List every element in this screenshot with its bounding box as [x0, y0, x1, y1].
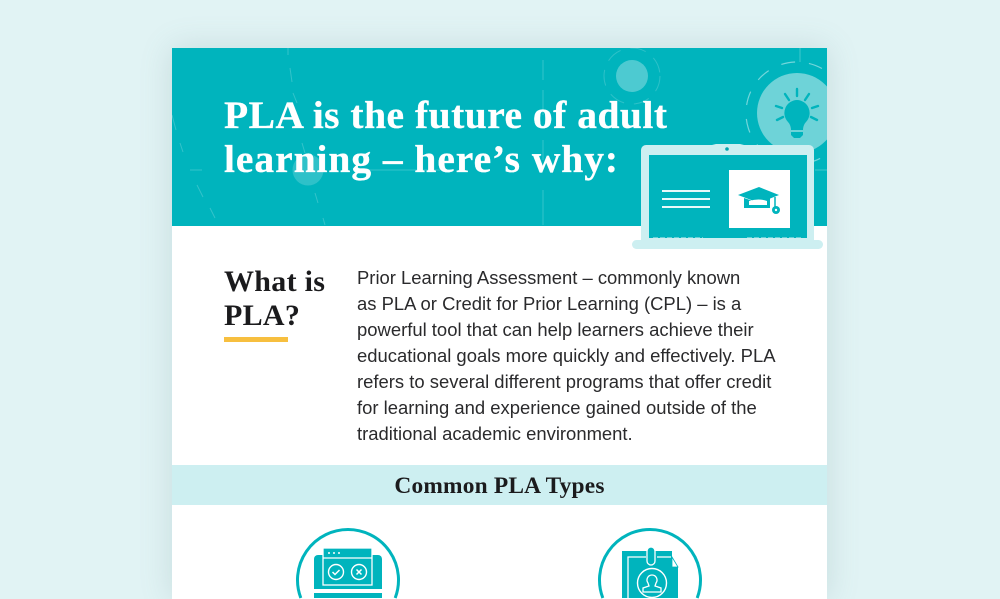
title: learning – here’s why: — [224, 137, 619, 181]
icon: laptop — [632, 144, 823, 249]
icon: light bulb — [746, 48, 827, 170]
title — [224, 93, 668, 181]
icon: portfolio document in circle — [599, 529, 700, 598]
heading: What is PLA?: What is — [224, 265, 325, 298]
heading underline — [224, 337, 288, 342]
text block: PLA definition: traditional academic environment. — [357, 423, 633, 444]
text block: PLA definition: powerful tool that can help learners achieve their — [357, 319, 754, 340]
panel: header banner — [172, 48, 827, 226]
icon: exam window in circle — [298, 529, 398, 598]
decorative background circle, left — [172, 48, 543, 225]
text block: PLA definition — [357, 267, 776, 444]
decorative background circle, top — [604, 48, 660, 104]
title: PLA is the future of adult — [224, 93, 668, 137]
text block: PLA definition: for learning and experience gained outside of the — [357, 397, 757, 418]
text block: PLA definition: as PLA or Credit for Prior Learning (CPL) – is a — [357, 293, 741, 314]
heading: What is PLA? — [224, 265, 325, 332]
text block: PLA definition: educational goals more quickly and effectively. PLA — [357, 345, 776, 366]
panel: Common PLA Types heading band: Common PLA Types — [394, 473, 605, 499]
card — [172, 48, 827, 599]
text block: PLA definition: refers to several different programs that offer credit — [357, 371, 771, 392]
header decoration and icons — [172, 48, 827, 598]
panel: Common PLA Types heading band — [172, 465, 827, 505]
heading: What is PLA?: PLA? — [224, 299, 300, 332]
text block: PLA definition: Prior Learning Assessment – commonly known — [357, 267, 740, 288]
